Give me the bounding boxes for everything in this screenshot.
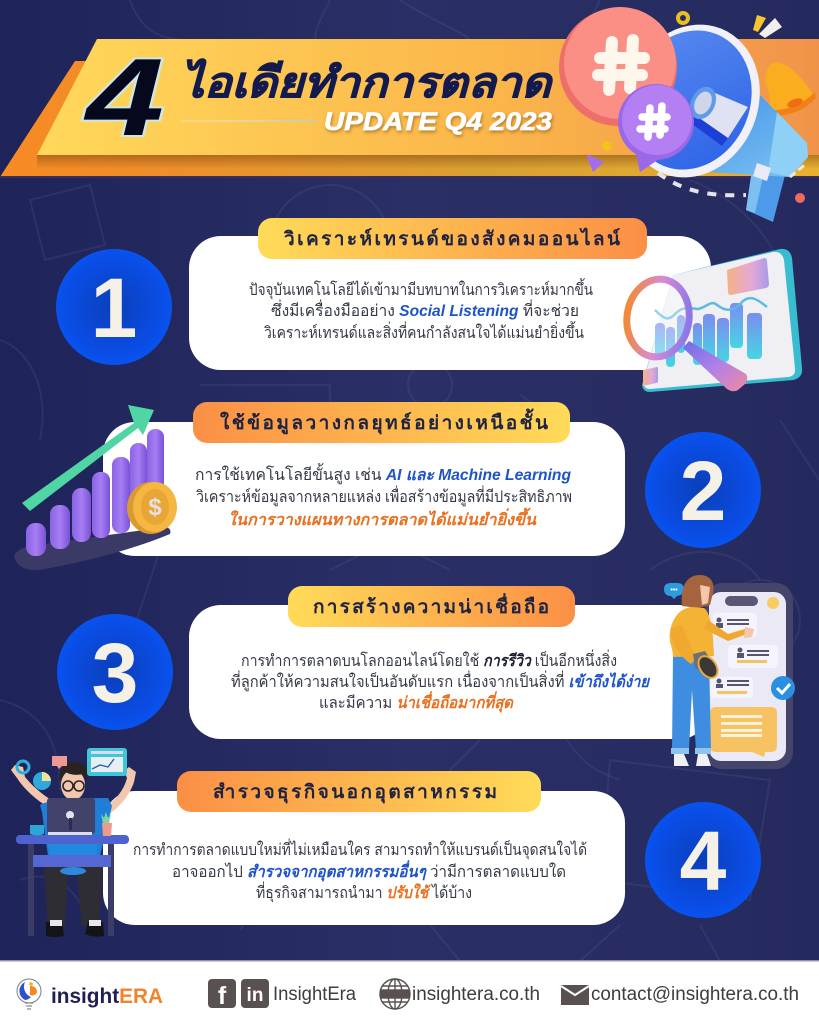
step 4 heading pill — [177, 771, 541, 812]
step 4 body text — [133, 838, 587, 903]
step 3: number circle — [57, 614, 173, 730]
icon: chart with magnifying glass — [622, 249, 802, 392]
icon: small purple triangle — [586, 154, 604, 172]
icon: man working at desk — [11, 748, 136, 937]
icon: insight era bulb logo — [17, 979, 41, 1009]
panel: step 1 — [189, 218, 711, 370]
step 2: number circle — [645, 432, 761, 548]
step 1 body text — [249, 278, 593, 342]
panel: step 4 — [103, 771, 625, 925]
website address: insightera.co.th — [412, 984, 540, 1005]
step 3 heading pill — [288, 586, 575, 627]
step 1 heading pill — [258, 218, 647, 259]
icon: woman pointing at review phone: ••• — [670, 587, 678, 594]
subtitle: UPDATE Q4 2023 — [324, 108, 552, 136]
panel: step 2 — [103, 402, 625, 556]
step 3 body text — [231, 649, 650, 713]
big number 4: 4 — [83, 36, 164, 159]
icon: yellow ring — [678, 13, 688, 23]
icon: mail — [561, 985, 589, 1005]
step 1 body text: ซึ่งมีเครื่องมืออย่าง Social Listening ที่จะช่วย — [271, 299, 579, 320]
title banner — [0, 36, 819, 178]
step 4 heading pill: สำรวจธุรกิจนอกอุตสาหกรรม — [213, 782, 497, 804]
step 4 body text: อาจออกไป สำรวจจากอุตสาหกรรมอื่นๆ ว่ามีการตลาดแบบใด — [172, 860, 566, 882]
icon: linkedin: in — [247, 985, 263, 1006]
step 2: number circle: 2 — [680, 444, 726, 538]
step 2 heading pill — [193, 402, 570, 443]
step 2 body text: วิเคราะห์ข้อมูลจากหลายแหล่ง เพื่อสร้างข้อมูลที่มีประสิทธิภาพ — [196, 485, 572, 507]
dashed sound arc — [658, 163, 807, 195]
step 3 heading pill: การสร้างความน่าเชื่อถือ — [313, 593, 549, 618]
icon: woman pointing at review phone — [664, 575, 795, 769]
panel: step 3 — [189, 586, 711, 739]
icon: megaphone handle — [746, 163, 785, 222]
icon: megaphone with hashtag bubbles — [559, 4, 816, 222]
facebook linkedin handle: InsightEra — [273, 984, 356, 1005]
icon: red dot — [795, 193, 805, 203]
step 4 body text: ที่ธุรกิจสามารถนำมา ปรับใช้ ได้บ้าง — [256, 881, 472, 903]
icon: growth bar chart with arrow and coin: $ — [148, 494, 162, 521]
step 3 body text: ที่ลูกค้าให้ความสนใจเป็นอันดับแรก เนื่องจากเป็นสิ่งที่ เข้าถึงได้ง่าย — [231, 670, 650, 692]
icon: confetti — [753, 15, 782, 38]
icon: facebook — [208, 979, 236, 1010]
step 3 body text: การทำการตลาดบนโลกออนไลน์โดยใช้ การรีวิว เป็นอีกหนึ่งสิ่ง — [241, 649, 617, 670]
icon: growth bar chart with arrow and coin — [14, 405, 177, 570]
icon: bell — [765, 62, 816, 116]
logo wordmark: insightERA — [51, 985, 163, 1008]
step 2 heading pill: ใช้ข้อมูลวางกลยุทธ์อย่างเหนือชั้น — [220, 408, 548, 435]
step 2 body text: การใช้เทคโนโลยีขั้นสูง เช่น AI และ Machine Learning — [195, 463, 571, 485]
step 2 body text — [195, 463, 572, 529]
step 1 body text: วิเคราะห์เทรนด์และสิ่งที่คนกำลังสนใจได้แม่นยำยิ่งขึ้น — [264, 321, 584, 342]
icon: megaphone body — [602, 4, 808, 198]
icon: globe — [380, 979, 410, 1009]
step 1 heading pill: วิเคราะห์เทรนด์ของสังคมออนไลน์ — [284, 227, 620, 250]
step 1 body text: ปัจจุบันเทคโนโลยีได้เข้ามามีบทบาทในการวิเคราะห์มากขึ้น — [249, 278, 593, 300]
step 4: number circle — [645, 802, 761, 918]
icon: purple hashtag bubble — [618, 84, 694, 172]
icon: pink hashtag bubble — [559, 7, 677, 126]
icon: facebook: f — [218, 982, 227, 1010]
icon: yellow dot — [602, 141, 612, 151]
email address: contact@insightera.co.th — [591, 984, 799, 1005]
icon: linkedin — [241, 979, 269, 1008]
step 4: number circle: 4 — [680, 814, 727, 908]
step 3 body text: และมีความ น่าเชื่อถือมากที่สุด — [319, 691, 515, 713]
step 4 body text: การทำการตลาดแบบใหม่ที่ไม่เหมือนใคร สามารถทำให้แบรนด์เป็นจุดสนใจได้ — [133, 838, 587, 860]
step 2 body text: ในการวางแผนทางการตลาดได้แม่นยำยิ่งขึ้น — [228, 507, 537, 529]
title divider line — [181, 120, 316, 122]
step 1: number circle: 1 — [91, 261, 137, 355]
title text: ไอเดียทำการตลาด — [181, 58, 554, 106]
step 1: number circle — [56, 249, 172, 365]
footer — [0, 960, 819, 1024]
step 3: number circle: 3 — [92, 626, 138, 720]
